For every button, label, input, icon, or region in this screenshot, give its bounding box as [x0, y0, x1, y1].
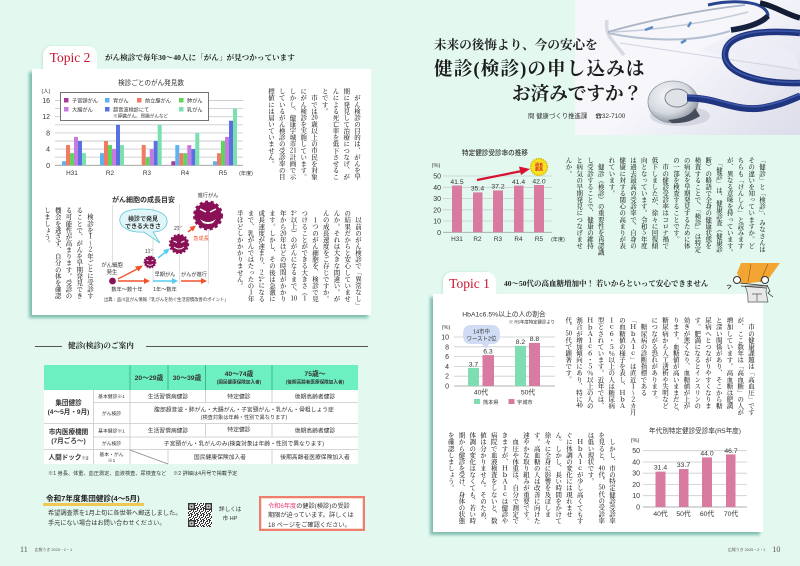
chart: 検診ごとのがん発見数: 12 — [42, 114, 50, 121]
text: 健診と検診の違い: んか。 — [564, 157, 574, 177]
badge: 過去 — [535, 161, 543, 167]
legend: 熊本県 — [483, 398, 499, 406]
diagram: がん細胞の成長目安: がんが進行 — [181, 270, 207, 278]
text: がんの成長速度: まで、乳がんではたったの 1 年 — [246, 210, 256, 302]
chart: 年代別特定健診受診率: 年代別特定健診受診率(R5年度) — [649, 426, 741, 435]
chart: HbA1c6.5%以上の人の割合: 8.2 — [516, 339, 525, 346]
chart: HbA1c6.5%以上の人の割合: 8 — [445, 344, 449, 351]
table: 健診の種類と年齢: (検査対象は年齢・性別で異なります) — [201, 413, 287, 421]
text: がん検診の目的: んによる死亡率を低下させるこ — [332, 88, 340, 180]
chart: 年代別特定健診受診率: 60代 — [700, 509, 714, 518]
text: 高血糖の解説: １ｃ６・５％以上の人は糖尿病 — [607, 317, 616, 409]
legend: 肺がん — [187, 96, 203, 104]
text: がんの成長速度: 1 つのがん細胞を、検診で見 — [311, 217, 320, 302]
icon: QR code — [188, 503, 212, 527]
chart: 特定健診受診率の推移: 35.4 — [471, 186, 484, 192]
callout: 受診期限: 期限が迫っています。詳しくは — [268, 512, 354, 519]
text: 健診と検診の違い: れています。 — [608, 157, 616, 196]
text: 早めの確認: 病院で血液検査をしないと、数 — [490, 432, 499, 524]
chart: HbA1c6.5%以上の人の割合: (%) — [442, 325, 450, 331]
table: 健診の種類と年齢: (4～5月・9月) — [48, 408, 89, 416]
diagram: がん細胞の成長目安: 1年～数年 — [153, 285, 177, 293]
text: 早めの確認: を見ると、 40 代、 50 代の受診率 — [597, 432, 606, 524]
diagram: がん細胞の成長目安 — [101, 191, 229, 303]
text: 高血糖の解説: が、ここ数年は「高血糖」の人が — [736, 317, 745, 416]
page number: 11: 11 広報うき 2025・2・1 — [20, 545, 72, 554]
legend: ※膵臓がん、胃腸がんなど — [113, 112, 169, 120]
chart: 年代別特定健診受診率: 40代 — [653, 509, 668, 518]
table: 健診の種類と年齢: 生活習慣病健診 — [148, 426, 188, 434]
text: がんの成長速度: 半ほどしかかかりません。 — [236, 210, 245, 289]
table: 健診の種類と年齢: 特定健診 — [227, 426, 251, 434]
text: がん検診の目的: しかし、健康宇城市 21 計画で示 — [288, 88, 298, 180]
text: 詳しくは市HP: 詳しくは — [219, 507, 241, 513]
text: 早めの確認: ん。しかし、長い時間をかけて — [554, 432, 563, 524]
chart: 特定健診受診率の推移: 40 — [433, 185, 441, 192]
table: 健診の種類と年齢: 75歳～ — [304, 369, 326, 378]
table: 健診の種類と年齢: がん検診 — [102, 410, 121, 417]
chart: 年代別特定健診受診率: 10 — [632, 493, 640, 500]
chart: 特定健診受診率の推移: 41.5 — [450, 179, 464, 186]
text: 健診と検診の違い: 健康に対する関心の高まりが表 — [618, 157, 627, 249]
text: 健診と検診の違い: ちらも「けんしん」と読みます — [736, 157, 746, 249]
table: 健診の種類と年齢: (国民健康保険加入者) — [217, 378, 262, 386]
text: がんの成長速度: 年から 20 年ほどの時間がかかり — [279, 210, 288, 302]
legend: 乳がん — [187, 106, 203, 114]
chart: 年代別特定健診受診率: (%) — [631, 438, 639, 444]
chart: 検診ごとのがん発見数: (人) — [42, 89, 51, 95]
bubble: ワースト2位: ワースト2位 — [467, 334, 497, 342]
topic 2 tab: Topic 2 — [50, 50, 90, 65]
chart: 特定健診受診率の推移: R5 — [535, 236, 544, 243]
text: 早めの確認: しかし、市の特定健診受診率 — [608, 439, 617, 524]
table: 健診の種類と年齢: 生活習慣病健診 — [148, 392, 188, 400]
table: 健診の種類と年齢: ※1 — [108, 458, 116, 464]
chart: 特定健診受診率の推移: H31 — [451, 236, 463, 243]
chart: 検診ごとのがん発見数: (年度) — [239, 169, 253, 177]
text: 受診のすすめ: る可能性が高まります。受診の — [64, 207, 74, 299]
early cell — [109, 278, 116, 284]
notice: 令和7年度集団健診: 手元にない場合はお問い合わせください。 — [48, 520, 166, 527]
legend — [60, 92, 208, 120]
text: 受診のすすめ: 検診を 1 ～ 2 年ごとに受診す — [86, 214, 95, 299]
chart: 検診ごとのがん発見数: R2 — [106, 170, 115, 177]
diagram: がん細胞の成長目安: がん細胞 — [101, 261, 123, 269]
virus 1cm: 1㌢ — [145, 247, 153, 255]
virus advanced: 進行がん — [198, 191, 218, 199]
text: 早めの確認 — [447, 432, 617, 524]
heading: 健診のご案内: 健診(検診)のご案内 — [68, 341, 134, 350]
text: 健診と検診の違い: と病気の早期発見につなげませ — [575, 157, 584, 249]
chart: 年代別特定健診受診率: 20 — [632, 482, 640, 489]
chart: 特定健診受診率の推移: 41.4 — [512, 179, 525, 186]
table: 健診の種類と年齢: 40～74歳 — [225, 369, 254, 378]
chart: 検診ごとのがん発見数: 16 — [42, 98, 50, 105]
diagram: がん細胞の成長目安: 急成長 — [193, 234, 209, 242]
diagram title: がん細胞の成長目安 — [112, 195, 175, 204]
text: 高血糖の解説 — [564, 317, 756, 416]
text: 高血糖の解説: 尿病へとつながりやすくなりま — [704, 317, 713, 409]
text: 高血糖の解説: 増加しています。高血糖は肥満 — [726, 317, 734, 409]
table: 健診の種類と年齢: (後期高齢者医療保険加入者) — [286, 378, 345, 386]
text: 高血糖の解説: の血糖値の様子を表し、ＨｂＡ — [618, 317, 627, 409]
text: 高血糖の解説: と深い関係があり、そこから糖 — [715, 317, 724, 409]
chart: HbA1c6.5%以上の人の割合: 8.8 — [530, 336, 539, 343]
text: がんの成長速度: んの成長速度をご存じですか。 — [322, 210, 331, 302]
table: 健診の種類と年齢: 子宮頸がん・乳がんのみ(検査対象は年齢・性別で異なります) — [164, 440, 324, 448]
table: 健診の種類と年齢: 後期高齢者健診 — [295, 426, 335, 434]
chart: HbA1c6.5%以上の人の割合: 2 — [445, 374, 449, 381]
legend: 超音波検診にて — [113, 106, 149, 114]
table: 健診の種類と年齢: 基本健診※1 — [98, 428, 125, 434]
chart: 特定健診受診率の推移: 特定健診受診率の推移 — [462, 148, 528, 157]
text: がん検診の目的: 市では 20 歳以上の市民を対象 — [310, 95, 319, 180]
table: 健診の種類と年齢 — [44, 365, 358, 464]
speech bubble: 検診で発見 — [128, 215, 158, 223]
virus 2cm: 2㌢ — [174, 224, 182, 232]
table: 健診の種類と年齢: 基本・がん — [100, 451, 124, 458]
text: 健診と検診の違い: の病気を早期発見するために体 — [683, 157, 692, 249]
chart: 特定健診受診率の推移: 42.0 — [532, 178, 546, 186]
text: がんの成長速度: ㌢ 以上）のがんになるまで、 10 — [290, 210, 298, 302]
diagram: がん細胞の成長目安: 数年～数十年 — [111, 285, 143, 293]
chart: 特定健診受診率の推移: (%) — [432, 163, 440, 169]
text: 健診と検診の違い: が、異なる意味を持っています。 — [726, 157, 735, 256]
chart: 検診ごとのがん発見数: 検診ごとのがん発見数 — [118, 78, 184, 87]
legend: 子宮頸がん — [72, 96, 98, 104]
text: がんの成長速度: ます。しかし、その後は急激に — [268, 210, 277, 302]
title block — [434, 38, 646, 120]
text: 高血糖の解説: 割合が増加傾向にあり、特に 40 — [575, 317, 584, 409]
photo: stethoscope — [575, 0, 800, 135]
chart: HbA1c6.5%以上の人の割合: 4 — [445, 364, 449, 371]
text: 健診と検診の違い — [564, 157, 767, 256]
text: 早めの確認: を確認しましょう。 — [447, 432, 456, 491]
diagram: がん細胞の成長目安: 発生 — [107, 268, 118, 276]
text: がん検診の目的: 標値には届いていません。 — [267, 88, 276, 167]
text: がんの成長速度 — [236, 210, 363, 309]
chart: 年代別特定健診受診率 — [631, 426, 747, 518]
text: 健診と検診の違い: 向となっています。令和 5 年度 — [640, 157, 649, 249]
chart: 年代別特定健診受診率: 31.4 — [654, 464, 667, 472]
topic 2 heading: がん検診で毎年30～40人に「がん」が見つかっています — [105, 53, 295, 62]
panel: topic 2 — [32, 69, 371, 315]
text: 早めの確認: 値は分かりません。そのため、 — [479, 432, 488, 524]
text: 早めの確認: す。高血糖の人は改善に向けた — [533, 432, 542, 524]
chart: 検診ごとのがん発見数: R5 — [219, 170, 228, 177]
text: 早めの確認: 徐々に全身に影響を及ぼしま — [544, 432, 552, 517]
table: 健診の種類と年齢: 特定健診 — [227, 392, 251, 400]
text: 早めの確認: 体調の変化はなくても、若い時 — [468, 432, 477, 524]
chart: 特定健診受診率の推移: 10 — [433, 218, 441, 226]
text: 高血糖の解説: 糖尿病の診断指標である — [640, 324, 648, 396]
legend: 胃がん — [113, 96, 129, 104]
diagram: がん細胞の成長目安: 早期がん — [155, 270, 175, 278]
badge — [531, 159, 547, 175]
contact: 問 健康づくり推進課 ☎32-7100 — [528, 113, 625, 120]
chart: 特定健診受診率の推移: 0 — [437, 230, 441, 237]
bubble: ワースト2位 — [463, 325, 500, 349]
text: がん検診の目的: 期に発見して治療につなげ、が — [342, 88, 351, 180]
text: 受診のすすめ — [43, 207, 95, 299]
table: 健診の種類と年齢: 集団健診 — [55, 398, 82, 407]
title line 2: 健診(検診)の申し込みは — [434, 59, 646, 80]
text: 健診と検診の違い: し受診することで、健康の維持 — [586, 157, 595, 249]
text: 高血糖の解説: につながる恐れがあります。 — [650, 317, 659, 402]
topic 1 tab — [443, 272, 496, 295]
text: 健診と検診の違い: 断）の略語で全身の健康状態を — [704, 157, 713, 249]
text: 高血糖の解説: 「ＨｂＡ１ｃ」は直近１～２カ月 — [629, 317, 638, 416]
table: 健診の種類と年齢: 腹部超音波・肺がん・大腸がん・子宮頸がん・乳がん・骨粗しょう症 — [154, 406, 334, 414]
table: 健診の種類と年齢: (7月ごろ～) — [51, 436, 86, 445]
illustration: character — [726, 263, 780, 302]
chart: 特定健診受診率の推移: (年度) — [551, 235, 565, 243]
text: がんの成長速度: の結果だからと安心していませ — [343, 210, 352, 302]
chart: 特定健診受診率の推移: R2 — [473, 236, 482, 243]
arrow — [477, 171, 522, 180]
chart: 特定健診受診率の推移: 30 — [433, 196, 441, 203]
chart: HbA1c6.5%以上の人の割合: 40代 — [474, 388, 488, 396]
chart: 年代別特定健診受診率: 33.7 — [677, 462, 690, 469]
text: がん検診の目的: がん検診の目的は、がんを早 — [353, 95, 362, 180]
callout: 受診期限 — [259, 496, 365, 531]
text: 早めの確認: 期から健診を受け、身体の状態 — [458, 432, 466, 524]
chart: 検診ごとのがん発見数: R3 — [143, 170, 152, 177]
text: がんの成長速度: 以前のがん検診で「異常なし」 — [354, 217, 363, 309]
topic 1 heading: 40～50代の高血糖増加中！ 若いからといって安心できません — [504, 279, 708, 288]
callout: 受診期限: 18 ページをご確認ください。 — [268, 522, 351, 529]
text: 高血糖の解説: 型とされています。近年では、 — [596, 317, 606, 409]
notice: 令和7年度集団健診: 希望調査票を1月上旬に各世帯へ郵送しました。 — [48, 510, 181, 517]
topic 1 tab: Topic 1 — [449, 276, 490, 291]
text: 健診と検診の違い: 市の健診受診率はコロナ禍で — [661, 164, 670, 249]
text: 健診と検診の違い: その違いを知っていますか。ど — [747, 157, 756, 249]
chart: HbA1c6.5%以上の人の割合: HbA1c6.5%以上の人の割合 — [462, 310, 546, 318]
text: 健診と検診の違い: 健診（検診）の重要性を再認識 — [597, 164, 606, 256]
chart: HbA1c6.5%以上の人の割合: ※ R5年度特定健診より — [509, 318, 555, 326]
text: 詳しくは市HP — [219, 506, 241, 522]
text: がんの成長速度: 成長速度が速まり、 2 ㌢ になる — [257, 210, 266, 302]
text: がん検診の目的 — [267, 88, 362, 180]
chart: 特定健診受診率の推移: 20 — [433, 207, 441, 214]
chart: 特定健診受診率の推移: 50 — [433, 174, 441, 180]
notice: 令和7年度集団健診 — [43, 494, 181, 527]
text: 高血糖の解説: 効きが悪くなり、血糖値が上が — [682, 317, 692, 409]
callout: 受診期限: 令和6年度の健診(検診)の受診 — [268, 503, 350, 510]
text: 早めの確認: ＨｂＡ１ｃが少し高くてもす — [576, 439, 585, 524]
table: 健診の種類と年齢: 基本健診※1 — [98, 393, 125, 400]
legend: 宇城市 — [517, 398, 533, 406]
text: 早めの確認: きますが、ＨｂＡ１ｃは健診や — [500, 432, 510, 524]
text: 早めの確認: ぐに体調の変化には現れませ — [565, 432, 574, 517]
table: 健診の種類と年齢: 後期高齢者健診 — [295, 392, 335, 400]
chart: 検診ごとのがん発見数: 0 — [46, 163, 50, 170]
text: 健診と検診の違い: 「健診」と「検診」、みなさんは — [758, 157, 767, 252]
table notes: ※1 身長、体重、血圧測定、血液検査、尿検査など ※2 詳細は4月号で掲載予定 — [48, 471, 237, 477]
chart: 特定健診受診率の推移: 37.2 — [491, 184, 505, 190]
table: 健診の種類と年齢: 後期高齢者医療保険加入者 — [280, 453, 350, 461]
text: 健診と検診の違い: の一部を検査することです。 — [672, 157, 681, 242]
text: 詳しくは市HP: 市 HP — [223, 516, 237, 522]
chart: HbA1c6.5%以上の人の割合: 6.3 — [483, 348, 493, 356]
chart: 検診ごとのがん発見数: 8 — [46, 130, 50, 137]
legend: 前立腺がん — [145, 96, 171, 104]
text: 受診のすすめ: ることで、がんを早期発見でき — [75, 207, 84, 299]
page number: 10: 広報うき 2025・2・1 10 — [728, 545, 780, 554]
speech bubble — [120, 209, 167, 243]
chart: 年代別特定健診受診率: 44.0 — [700, 450, 714, 458]
chart: 年代別特定健診受診率: 40 — [632, 460, 640, 466]
text: 高血糖の解説: す。肥満になるとインスリンの — [693, 317, 702, 409]
legend: 大腸がん — [72, 106, 93, 114]
chart: 年代別特定健診受診率: 30 — [632, 471, 640, 478]
chart: 検診ごとのがん発見数: R4 — [181, 170, 190, 177]
table: 健診の種類と年齢: 30～39歳 — [173, 373, 202, 382]
table: 健診の種類と年齢: 市内医療機関 — [49, 427, 89, 436]
text: がん検診の目的: とです。 — [321, 88, 330, 114]
arrows — [118, 226, 207, 284]
chart: 検診ごとのがん発見数 — [42, 78, 253, 177]
panel: topic 1 — [433, 294, 763, 532]
text: 健診と検診の違い: は過去最高の受診率で、自身の — [629, 157, 638, 249]
text: がん検診の目的: しているがん検診の受診率の目 — [278, 88, 287, 180]
text: 早めの確認: 血圧や体重は、自分で測定で — [511, 439, 520, 524]
text: 高血糖の解説: 代、 50 代で顕著です。 — [564, 317, 573, 383]
chart: 年代別特定健診受診率: 0 — [636, 504, 640, 512]
notice: 令和7年度集団健診: 令和7年度集団健診(4～5月) — [46, 494, 140, 503]
badge: 最高 — [535, 166, 543, 172]
chart: HbA1c6.5%以上の人の割合: 0 — [445, 384, 449, 390]
table: 健診の種類と年齢: 20～29歳 — [135, 373, 164, 382]
chart: 特定健診受診率の推移: R4 — [514, 236, 523, 243]
text: 健診と検診の違い: 検査することで、「検診」は特定 — [694, 157, 702, 252]
table: 健診の種類と年齢: がん検診 — [102, 440, 121, 447]
chart: 年代別特定健診受診率: 50代 — [676, 509, 691, 518]
chart: 年代別特定健診受診率: 46.7 — [724, 448, 738, 455]
text: 受診のすすめ: 機会を逃さず、自分の体を確認 — [54, 207, 63, 299]
table: 健診の種類と年齢: 国民健康保険加入者 — [194, 453, 246, 461]
text: 早めの確認: 速やかな取り組みが重要です。 — [522, 432, 531, 524]
chart: HbA1c6.5%以上の人の割合: 50代 — [521, 388, 535, 396]
chart: 検診ごとのがん発見数: 4 — [46, 147, 50, 154]
speech bubble: できる大きさ — [125, 222, 161, 230]
title line 3: お済みですか？ — [512, 84, 642, 105]
chart: 特定健診受診率の推移: R3 — [494, 236, 503, 243]
text: 高血糖の解説: 糖尿病から人工透析や失明など — [661, 317, 670, 409]
text: 高血糖の解説: ＨｂＡ１ｃ６・５％以上の人の — [586, 317, 595, 409]
chart: HbA1c6.5%以上の人の割合: 10 — [441, 334, 449, 342]
chart: 特定健診受診率の推移 — [432, 148, 565, 243]
text: がん検診の目的: にがん検診を実施しています。 — [299, 88, 308, 180]
chart: 検診ごとのがん発見数: H31 — [66, 170, 78, 177]
bubble: ワースト2位: 14市中 — [473, 328, 490, 336]
text: 健診と検診の違い: 低下しましたが、徐々に回復傾 — [650, 157, 660, 249]
text: 高血糖の解説: 市の健康課題は「高血圧」です — [747, 324, 756, 416]
text: 健診と検診の違い: 「健診」は、健康診査（健康診 — [715, 164, 724, 252]
table header — [44, 365, 358, 390]
chart: 年代別特定健診受診率: 50 — [632, 448, 640, 455]
chart: HbA1c6.5%以上の人の割合: 6 — [445, 354, 449, 361]
table: 健診の種類と年齢: 人間ドック※2 — [49, 452, 89, 462]
text: がんの成長速度: んか。それは大きな間違い。が — [332, 210, 342, 302]
title line 1: 未来の後悔より、今の安心を — [434, 38, 598, 52]
source: 出典：品川区がん情報「乳がんを防ぐ生活習慣改善のポイント」 — [104, 296, 229, 303]
chart: 年代別特定健診受診率: 70代 — [724, 509, 738, 518]
text: がんの成長速度: つけることができる大きさ（ 1 — [300, 210, 309, 302]
chart: HbA1c6.5%以上の人の割合: 3.7 — [469, 362, 478, 368]
chart: HbA1c6.5%以上の人の割合 — [441, 310, 555, 406]
topic 2 tab — [43, 46, 97, 70]
text: 高血糖の解説: ります。血糖値が高いままだと、 — [672, 317, 681, 416]
legend — [474, 398, 533, 406]
text: 受診のすすめ: しましょう。 — [43, 207, 52, 246]
text: 早めの確認: は低い現状です。 — [586, 432, 596, 485]
